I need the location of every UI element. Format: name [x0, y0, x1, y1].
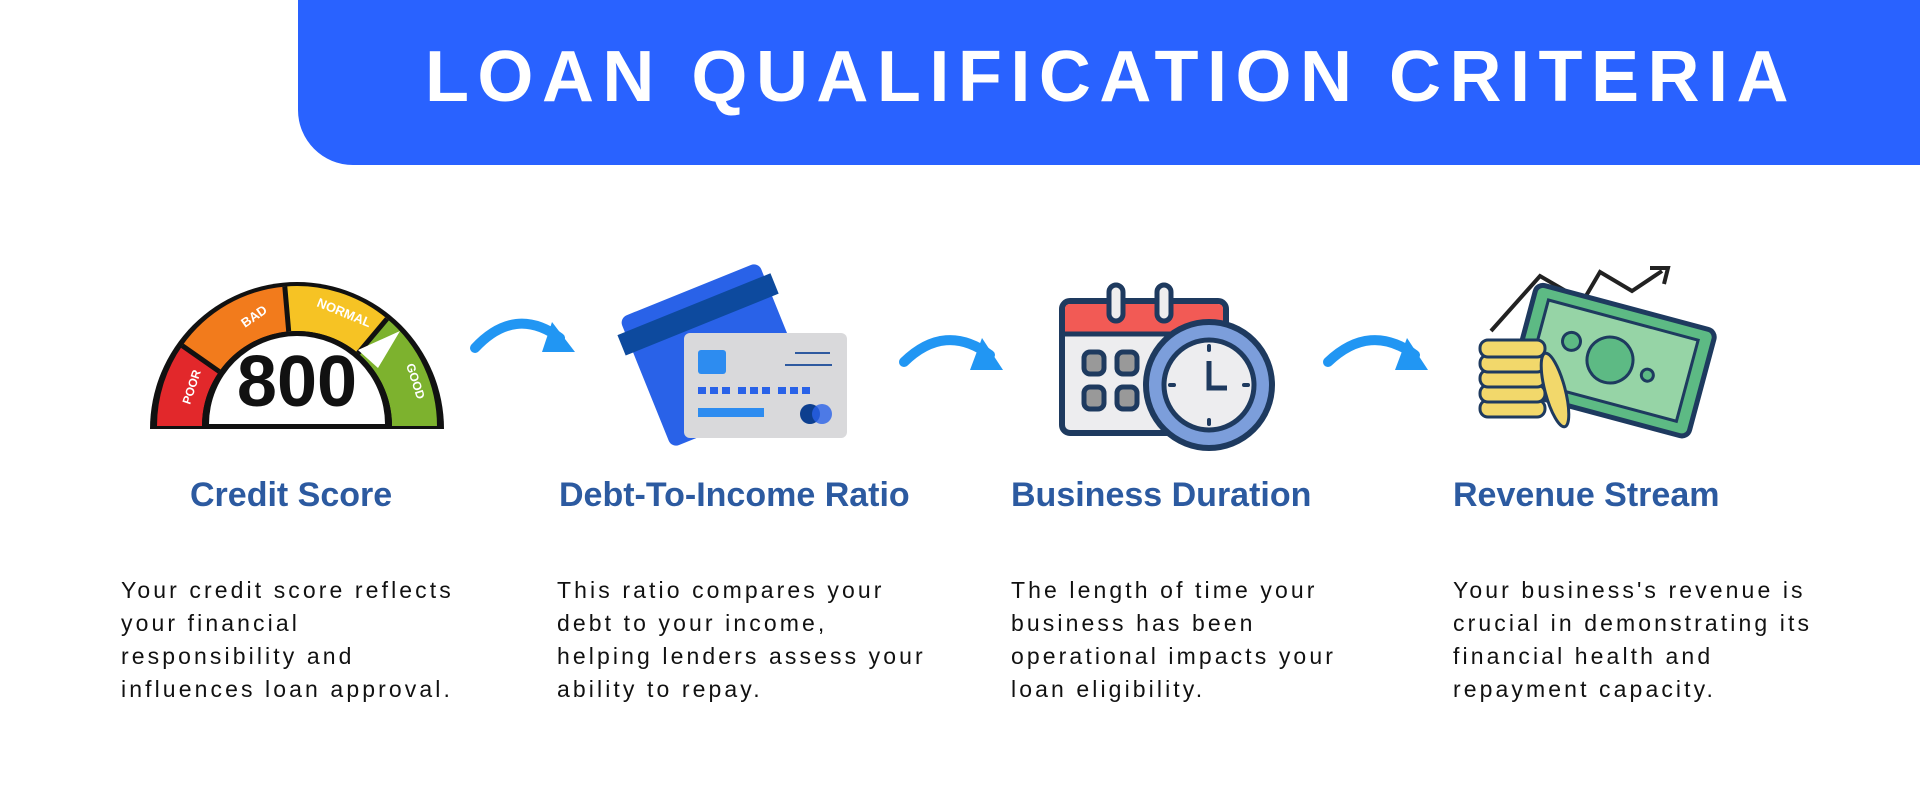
text: debt-to-income: helping lenders assess your	[557, 643, 926, 669]
text: debt-to-income	[557, 577, 926, 702]
text: business duration: The length of time your	[1011, 577, 1318, 603]
arrow 1	[475, 322, 575, 352]
text: credit score: your financial	[121, 610, 300, 636]
icon: credit cards	[617, 262, 847, 448]
icon: credit score gauge: 800	[237, 342, 357, 422]
text: revenue stream	[1453, 577, 1812, 702]
icon: credit score gauge: BAD	[238, 302, 270, 330]
icon: money with growth chart	[1480, 268, 1716, 438]
icon: calendar with clock	[1062, 285, 1272, 448]
text: revenue stream: repayment capacity.	[1453, 676, 1716, 702]
text: debt-to-income: debt to your income,	[557, 610, 827, 636]
arrow 3	[1328, 338, 1428, 370]
text: revenue stream: Your business's revenue is	[1453, 577, 1806, 603]
text: revenue stream: crucial in demonstrating its	[1453, 610, 1812, 636]
arrow 2	[904, 338, 1003, 370]
text: debt-to-income: This ratio compares your	[557, 577, 884, 603]
text: credit score: responsibility and	[121, 643, 355, 669]
text: business duration: operational impacts your	[1011, 643, 1336, 669]
text: business duration	[1011, 577, 1336, 702]
icon: credit score gauge: NORMAL	[315, 295, 373, 330]
text: business duration: business has been	[1011, 610, 1256, 636]
text: debt-to-income: ability to repay.	[557, 676, 763, 702]
icon: credit score gauge: POOR	[180, 368, 204, 406]
heading: debt-to-income: Debt-To-Income Ratio	[559, 476, 910, 514]
icon: credit score gauge: GOOD	[403, 362, 428, 401]
heading: business duration: Business Duration	[1011, 476, 1311, 514]
text: credit score: influences loan approval.	[121, 676, 453, 702]
text: revenue stream: financial health and	[1453, 643, 1713, 669]
text: credit score: Your credit score reflects	[121, 577, 454, 603]
banner	[298, 0, 1920, 165]
heading: credit score: Credit Score	[190, 476, 392, 514]
text: business duration: loan eligibility.	[1011, 676, 1205, 702]
icon: credit score gauge	[150, 282, 444, 429]
heading: revenue stream: Revenue Stream	[1453, 476, 1719, 514]
text: credit score	[121, 577, 454, 702]
title: LOAN QUALIFICATION CRITERIA	[425, 37, 1797, 117]
